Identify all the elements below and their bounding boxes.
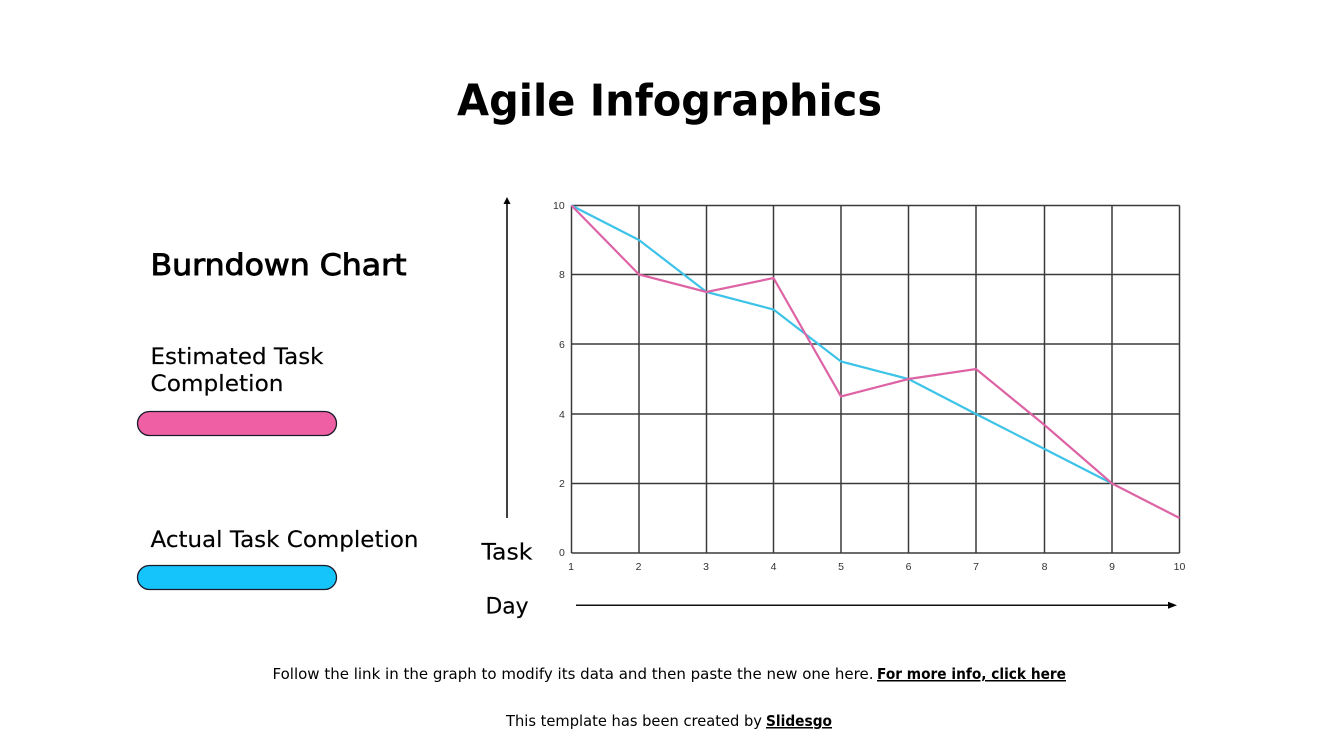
x axis numbers: 4 [771,561,777,573]
y axis numbers: 8 [559,269,565,281]
y axis numbers: 6 [559,339,565,351]
legend heading: Burndown Chart [150,248,406,282]
x axis numbers: 6 [906,561,912,573]
estimated task label: Estimated Task [150,345,324,370]
x axis numbers: 7 [973,561,979,573]
title: Agile Infographics [457,76,882,126]
estimated swatch [138,412,336,436]
x axis numbers: 8 [1042,561,1048,573]
x axis numbers: 9 [1109,561,1115,573]
y axis numbers: 10 [553,200,565,212]
actual swatch [138,566,336,590]
task axis label: Task [480,540,533,566]
credit line: This template has been created by [505,712,762,730]
arrow: day axis [576,602,1177,609]
y axis numbers: 0 [559,547,565,559]
panel: legend [138,248,418,590]
x axis numbers: 5 [838,561,844,573]
chart grid [572,206,1180,553]
actual task line [572,206,1112,484]
burndown chart [553,200,1185,573]
x axis numbers: 3 [703,561,709,573]
x axis numbers [568,561,1185,573]
estimated task line [572,206,1180,518]
estimated task label: Completion [150,372,284,397]
instruction note: Follow the link in the graph to modify its data and then paste the new one here. [272,665,874,683]
actual task label: Actual Task Completion [150,528,418,553]
credit line: Slidesgo [766,712,832,730]
arrow: task axis [504,197,510,518]
x axis numbers: 1 [568,561,574,573]
instruction note: For more info, click here [877,665,1066,683]
x axis numbers: 10 [1174,561,1185,573]
y axis numbers: 2 [559,478,565,490]
day axis label: Day [486,594,528,620]
x axis numbers: 2 [636,561,642,573]
y axis numbers: 4 [559,409,565,421]
y axis numbers [553,200,565,559]
